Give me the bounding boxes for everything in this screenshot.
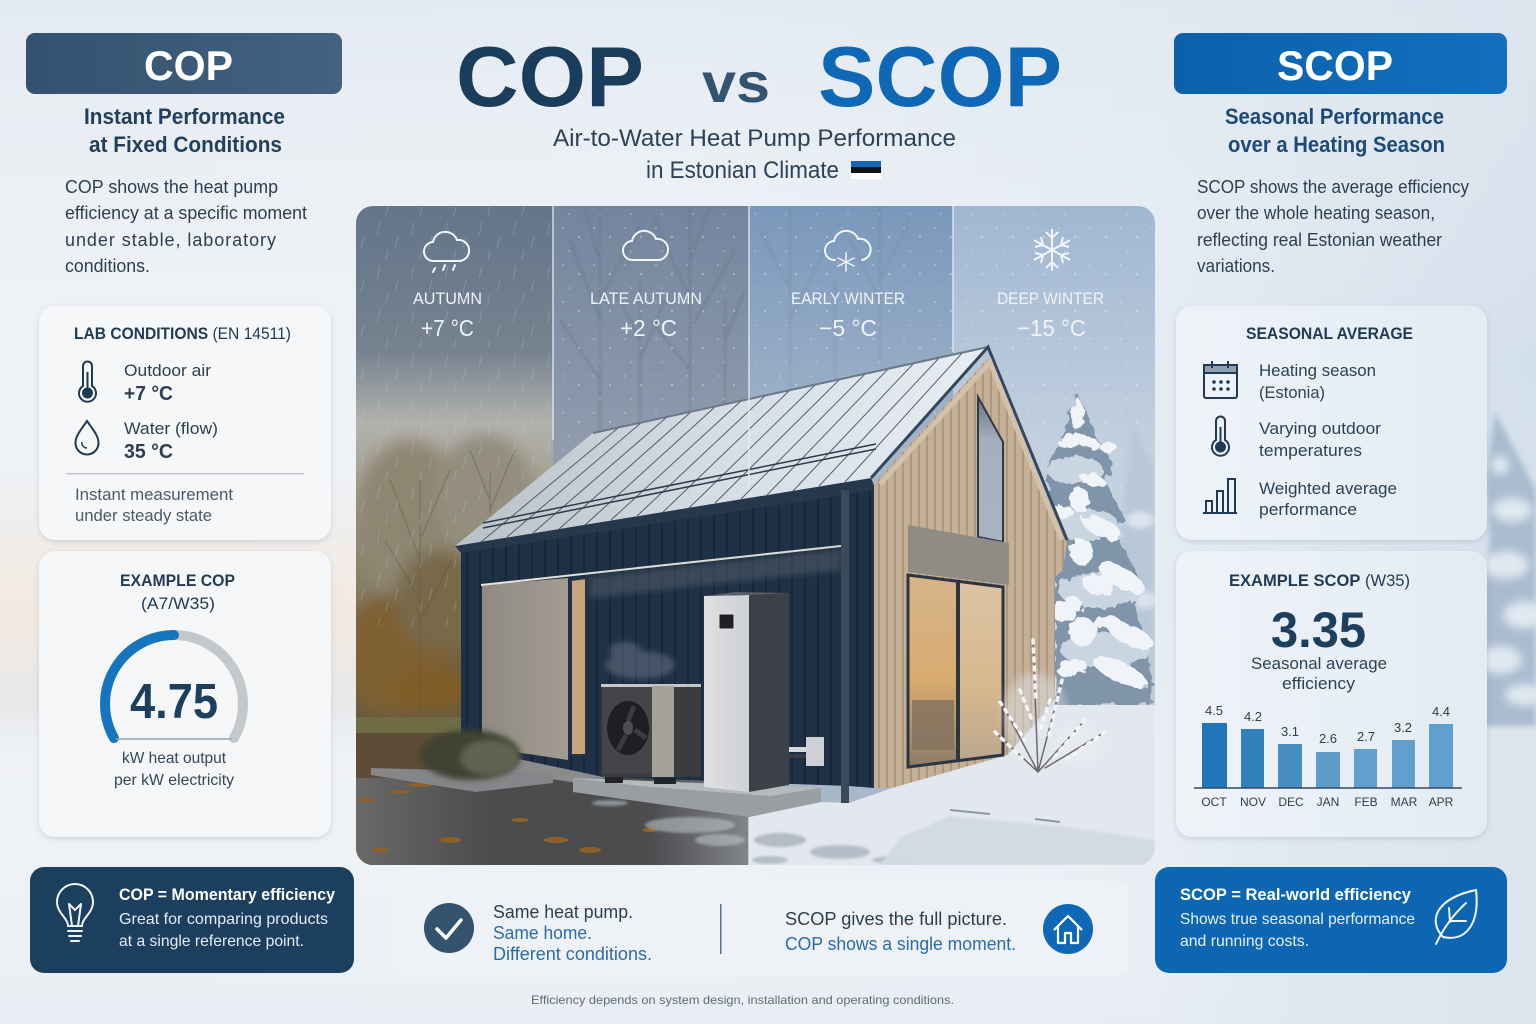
season labels: EARLY WINTER bbox=[791, 289, 905, 308]
bar chart: NOV bbox=[1240, 795, 1266, 809]
panel: seasonal average: performance bbox=[1259, 500, 1357, 519]
autumn trees bbox=[340, 435, 535, 715]
pipes bbox=[789, 737, 824, 766]
panel: lab conditions: Water (flow) bbox=[124, 419, 218, 438]
panel: seasonal average bbox=[1176, 306, 1487, 540]
icon: rain cloud bbox=[424, 232, 469, 272]
heading: COP subtitle: at Fixed Conditions bbox=[89, 132, 282, 157]
icon: house bbox=[1043, 904, 1093, 954]
heading: SCOP subtitle: Seasonal Performance bbox=[1225, 104, 1444, 129]
background spruce bbox=[1110, 442, 1155, 705]
text block: SCOP description: SCOP shows the average efficiency bbox=[1197, 177, 1469, 197]
callout: shared message: COP shows a single moment. bbox=[785, 934, 1016, 954]
beige panel bbox=[482, 578, 568, 760]
grey band bbox=[908, 525, 1009, 585]
callout: SCOP summary: Shows true seasonal performance bbox=[1180, 911, 1415, 928]
icon: leaf bbox=[1436, 890, 1477, 944]
bar chart: 2.6 bbox=[1319, 731, 1337, 746]
text block: COP description: COP shows the heat pump bbox=[65, 177, 278, 197]
callout: shared message bbox=[393, 881, 1129, 976]
icon: water drop bbox=[76, 421, 98, 454]
panel: SCOP column header: SCOP bbox=[1277, 42, 1393, 89]
panel: example SCOP bbox=[1176, 551, 1487, 837]
season labels: DEEP WINTER bbox=[997, 289, 1104, 308]
bar chart: APR bbox=[1429, 795, 1454, 809]
callout: shared message: Different conditions. bbox=[493, 944, 652, 964]
panel: lab conditions: 35 °C bbox=[124, 441, 173, 463]
season labels: −15 °C bbox=[1017, 315, 1086, 341]
title: vs bbox=[702, 51, 770, 114]
season dividers bbox=[553, 206, 953, 865]
panel: lab conditions: Outdoor air bbox=[124, 361, 211, 380]
bar chart: 4.5 bbox=[1205, 703, 1223, 718]
season labels: AUTUMN bbox=[413, 289, 482, 308]
callout: shared message: Same home. bbox=[493, 923, 592, 943]
callout: COP summary: at a single reference point. bbox=[119, 933, 304, 950]
icon: snowflake bbox=[1034, 229, 1070, 271]
text block: SCOP description bbox=[1197, 177, 1469, 276]
text block: SCOP description: over the whole heating season, bbox=[1197, 203, 1435, 223]
panel: example COP: (A7/W35) bbox=[141, 594, 215, 613]
panel: example SCOP: Seasonal average bbox=[1251, 654, 1387, 673]
text block: SCOP description: reflecting real Estonian weather bbox=[1197, 230, 1442, 250]
bar chart: FEB bbox=[1354, 795, 1378, 809]
panel: lab conditions: +7 °C bbox=[124, 383, 173, 405]
callout: SCOP summary bbox=[1155, 867, 1507, 973]
house wall bbox=[461, 490, 874, 788]
grass and leaf bed bbox=[356, 717, 461, 778]
bar chart: 3.2 bbox=[1394, 720, 1412, 735]
panel: example COP: EXAMPLE COP bbox=[120, 571, 235, 590]
icon: bar chart bbox=[1203, 479, 1237, 513]
callout: COP summary: Great for comparing products bbox=[119, 911, 328, 928]
icon: cloud bbox=[623, 231, 668, 260]
text block: COP description bbox=[65, 177, 307, 276]
panel: example SCOP: 3.35 bbox=[1271, 602, 1366, 658]
text block: COP description: efficiency at a specific moment bbox=[65, 203, 307, 223]
text block: SCOP description: variations. bbox=[1197, 256, 1275, 276]
bare trees bbox=[560, 212, 883, 430]
icon: light bulb bbox=[57, 884, 93, 941]
outdoor unit bbox=[601, 684, 701, 784]
heading: COP subtitle: Instant Performance bbox=[84, 104, 285, 129]
bar chart: OCT bbox=[1201, 795, 1227, 809]
season labels: LATE AUTUMN bbox=[590, 289, 702, 308]
panel: example SCOP: EXAMPLE SCOP (W35) bbox=[1229, 571, 1410, 590]
panel: seasonal average: SEASONAL AVERAGE bbox=[1246, 324, 1413, 343]
bar chart: 2.7 bbox=[1357, 729, 1375, 744]
subtitle: Air-to-Water Heat Pump Performance bbox=[553, 125, 956, 152]
season labels: +7 °C bbox=[421, 315, 474, 341]
ground: snow bbox=[749, 705, 1155, 865]
callout: shared message: SCOP gives the full picture. bbox=[785, 909, 1007, 929]
callout: COP summary bbox=[30, 867, 354, 973]
wood gable bbox=[874, 358, 1067, 788]
panel: lab conditions: under steady state bbox=[75, 506, 212, 525]
panel: lab conditions bbox=[39, 306, 331, 540]
panel: seasonal average: temperatures bbox=[1259, 441, 1362, 460]
bar chart: 4.4 bbox=[1432, 704, 1450, 719]
text block: COP description: conditions. bbox=[65, 256, 150, 276]
snowy bush bbox=[995, 640, 1105, 772]
season labels bbox=[413, 292, 1104, 336]
footer note: Efficiency depends on system design, installation and operating conditions. bbox=[531, 993, 954, 1007]
panel: COP column header: COP bbox=[144, 42, 233, 89]
concrete pad bbox=[573, 778, 821, 817]
bar chart: MAR bbox=[1391, 795, 1418, 809]
panel: example COP: per kW electricity bbox=[114, 772, 234, 789]
glass door bbox=[908, 575, 1003, 767]
downpipe bbox=[841, 490, 849, 803]
bar chart: 3.1 bbox=[1281, 724, 1299, 739]
upper window bbox=[978, 397, 1003, 542]
season labels: +2 °C bbox=[620, 315, 677, 341]
panel: example COP bbox=[39, 551, 331, 837]
heading: COP subtitle bbox=[84, 104, 285, 157]
icon: thermometer bbox=[79, 362, 96, 402]
panel: seasonal average: Weighted average bbox=[1259, 479, 1397, 498]
panel: seasonal average: (Estonia) bbox=[1259, 383, 1325, 402]
callout: SCOP summary: SCOP = Real-world efficiency bbox=[1180, 885, 1412, 904]
roof bbox=[455, 347, 988, 546]
heading: SCOP subtitle: over a Heating Season bbox=[1228, 132, 1445, 157]
callout: shared message: Same heat pump. bbox=[493, 902, 633, 922]
planter and bush bbox=[371, 730, 553, 792]
subtitle: in Estonian Climate bbox=[646, 157, 839, 184]
callout: SCOP summary: and running costs. bbox=[1180, 933, 1309, 950]
panel: COP column header bbox=[26, 33, 342, 94]
icon: calendar bbox=[1204, 361, 1237, 398]
panel: seasonal average: Varying outdoor bbox=[1259, 419, 1381, 438]
gauge: 4.75 bbox=[130, 675, 218, 729]
panel: lab conditions: LAB CONDITIONS (EN 14511) bbox=[74, 324, 291, 343]
title: SCOP bbox=[818, 30, 1062, 125]
bar chart: 4.2 bbox=[1244, 709, 1262, 724]
spruce tree bbox=[1047, 393, 1157, 705]
panel: example SCOP: efficiency bbox=[1282, 674, 1356, 693]
bar chart: DEC bbox=[1278, 795, 1304, 809]
indoor tower unit bbox=[704, 592, 789, 792]
panel: lab conditions: Instant measurement bbox=[75, 485, 233, 504]
bar chart bbox=[1194, 703, 1462, 809]
subtitle bbox=[553, 125, 956, 184]
title bbox=[456, 30, 1062, 125]
heading: SCOP subtitle bbox=[1225, 104, 1445, 157]
icon: check bbox=[424, 903, 474, 953]
icon: Estonian flag bbox=[851, 161, 881, 179]
panel: example COP: kW heat output bbox=[122, 750, 227, 767]
gauge bbox=[105, 635, 243, 739]
season labels: −5 °C bbox=[819, 315, 877, 341]
panel: seasonal average: Heating season bbox=[1259, 361, 1376, 380]
steam bbox=[605, 642, 675, 679]
panel: SCOP column header bbox=[1174, 33, 1507, 94]
bar chart: JAN bbox=[1317, 795, 1339, 809]
text block: COP description: under stable, laboratory bbox=[65, 230, 276, 250]
title: COP bbox=[456, 30, 644, 125]
ground: wet asphalt bbox=[356, 778, 750, 865]
icon: thermometer bbox=[1212, 416, 1229, 456]
panel: photo with seasons bbox=[340, 206, 1157, 865]
callout: COP summary: COP = Momentary efficiency bbox=[119, 885, 336, 904]
icon: snow cloud bbox=[825, 231, 871, 271]
